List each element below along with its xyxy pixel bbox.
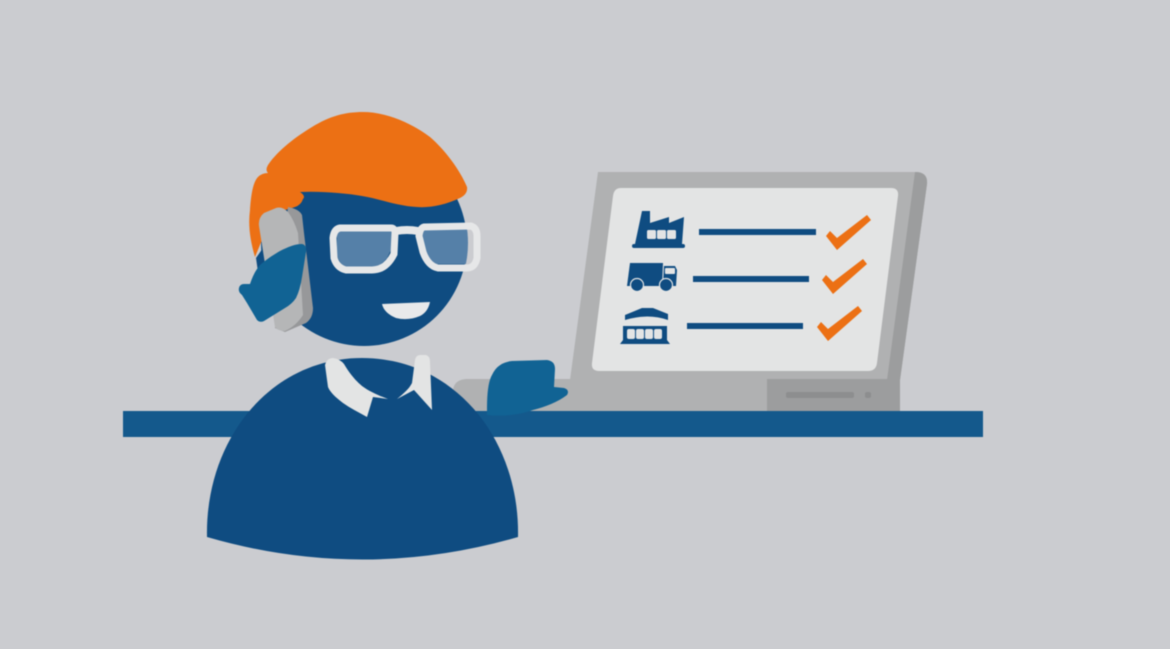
neck wedge behind phone — [256, 248, 270, 272]
check 1 — [826, 215, 871, 250]
collar right — [397, 355, 432, 410]
icon: store — [620, 308, 670, 344]
left hand holding phone — [239, 244, 306, 322]
laptop base — [453, 379, 770, 411]
port light — [865, 392, 871, 398]
phone face — [259, 208, 303, 331]
face — [261, 140, 467, 346]
phone side — [275, 207, 313, 332]
checklist — [620, 211, 871, 344]
frame left — [333, 228, 395, 270]
illustration: agent on phone with laptop checklist — [122, 111, 984, 560]
laptop port block — [767, 379, 900, 411]
desk — [123, 411, 983, 437]
lens tint right — [420, 229, 470, 264]
laptop screen — [592, 188, 898, 371]
lid shaded edge — [887, 172, 927, 380]
head — [249, 112, 477, 346]
line 1 — [699, 229, 816, 235]
frame right — [419, 226, 477, 268]
icon: truck — [627, 263, 677, 292]
glasses — [333, 226, 477, 270]
torso — [207, 355, 518, 560]
check 2 — [822, 259, 867, 294]
laptop lid — [570, 172, 927, 380]
check 3 — [817, 306, 862, 341]
line 2 — [693, 276, 809, 282]
phone — [259, 207, 313, 332]
icon: factory — [632, 211, 685, 248]
hair — [249, 112, 467, 257]
port slot — [786, 392, 854, 398]
laptop — [453, 172, 927, 411]
sweater — [207, 358, 518, 560]
line 3 — [687, 323, 803, 329]
right hand on laptop — [487, 360, 568, 416]
lens tint left — [337, 231, 393, 268]
smile — [382, 302, 430, 319]
collar left — [325, 358, 388, 417]
bridge — [396, 230, 418, 231]
